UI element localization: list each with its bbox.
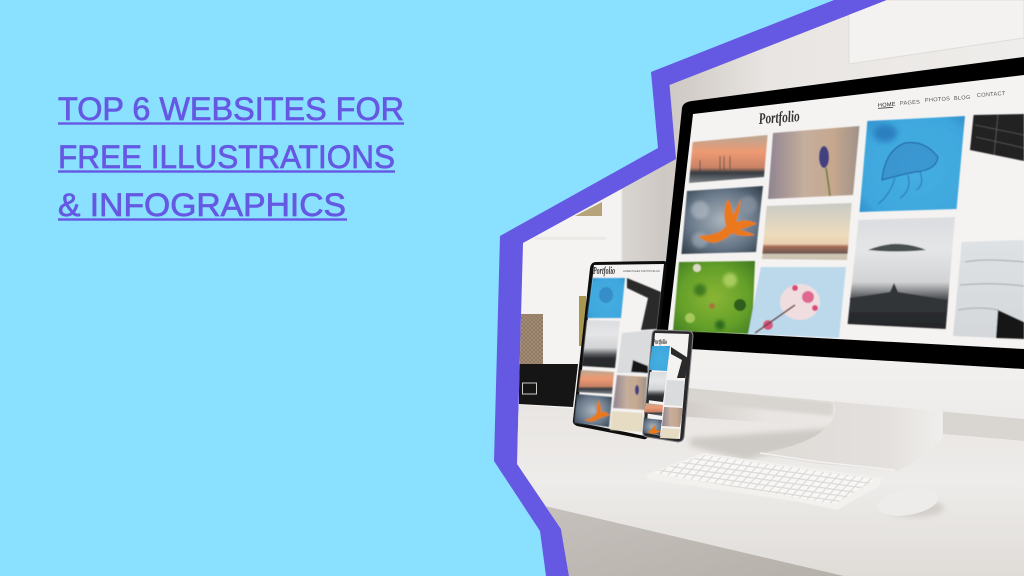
tablet photo: starfish <box>574 394 612 427</box>
stand base highlight <box>760 453 895 470</box>
tablet gallery <box>574 278 661 432</box>
tablet photo: sea <box>617 330 652 373</box>
phone photo: sand <box>660 428 680 439</box>
desk photo <box>510 0 1024 576</box>
photo: sea <box>953 240 1024 339</box>
mouse shadow <box>884 499 944 517</box>
mouse <box>875 484 944 520</box>
monitor <box>657 57 1024 369</box>
navigation menu: PAGES <box>900 100 920 107</box>
navigation menu: CONTACT <box>977 91 1006 99</box>
phone logo: Portfolio <box>653 338 667 346</box>
tablet nav: HOME PAGES PHOTOS BLOG <box>623 269 660 273</box>
desk underside <box>545 506 848 576</box>
keyboard <box>647 453 882 510</box>
monitor screen <box>668 75 1024 349</box>
tablet body <box>573 261 667 439</box>
phone gallery <box>643 346 688 439</box>
photo: sunset <box>689 135 768 183</box>
navigation menu <box>878 91 1006 109</box>
tablet photo: jellyfish <box>587 278 625 318</box>
portfolio logo: Portfolio <box>757 108 800 128</box>
photo: jellyfish <box>860 116 965 212</box>
tablet <box>573 261 667 439</box>
tablet photo: structure <box>627 278 661 330</box>
phone photo: structure <box>671 347 688 378</box>
wall panel <box>849 0 1024 64</box>
wicker basket <box>520 314 543 365</box>
title: TOP 6 WEBSITES FOR <box>58 91 404 127</box>
keyboard body <box>647 453 882 510</box>
book spine <box>579 296 586 346</box>
photo: dark structure <box>970 114 1024 161</box>
phone photo: sea <box>664 380 685 406</box>
gallery photos <box>673 114 1024 339</box>
picture frame on wall <box>575 202 602 216</box>
phone body <box>643 330 693 442</box>
photo: green leaves <box>673 261 755 334</box>
photo: flower <box>768 126 860 199</box>
box label <box>522 383 536 394</box>
tablet screen <box>576 264 664 436</box>
title: FREE ILLUSTRATIONS <box>58 139 395 175</box>
navigation menu: BLOG <box>954 95 971 102</box>
phone <box>643 330 693 442</box>
shelf shadow line <box>534 237 606 240</box>
shadow under chin <box>738 394 834 416</box>
monitor chin <box>688 346 1024 419</box>
tablet photo: fog <box>582 320 620 368</box>
tablet logo: Portfolio <box>593 266 615 277</box>
phone photo: jellyfish <box>649 346 670 371</box>
stand shadow <box>690 428 835 460</box>
photo: starfish <box>681 186 763 254</box>
keyboard keys <box>652 455 876 504</box>
navigation menu: PHOTOS <box>925 96 950 104</box>
navigation menu: HOME <box>878 102 896 109</box>
tablet photo: sunset <box>578 370 614 394</box>
wall shadow right of stand <box>943 410 1024 441</box>
tablet photo: sand <box>610 411 643 432</box>
black box <box>519 364 578 407</box>
tablet photo: flower <box>613 375 647 410</box>
title: & INFOGRAPHICS <box>58 187 346 223</box>
desk surface <box>510 404 1024 576</box>
phone photo: sunset <box>644 403 663 416</box>
title <box>58 91 404 223</box>
phone photo: flower <box>662 407 683 427</box>
phone photo: starfish <box>643 418 662 435</box>
purple angular frame <box>494 0 1024 576</box>
photo: pink blossom <box>748 267 846 338</box>
phone photo: fog <box>647 372 667 402</box>
wall <box>510 0 1024 450</box>
monitor stand <box>759 402 900 471</box>
photo: foggy village <box>848 217 955 329</box>
photo: harbour town <box>762 203 852 260</box>
mouse body <box>875 484 941 520</box>
phone screen <box>646 333 689 439</box>
monitor bezel <box>657 57 1024 369</box>
